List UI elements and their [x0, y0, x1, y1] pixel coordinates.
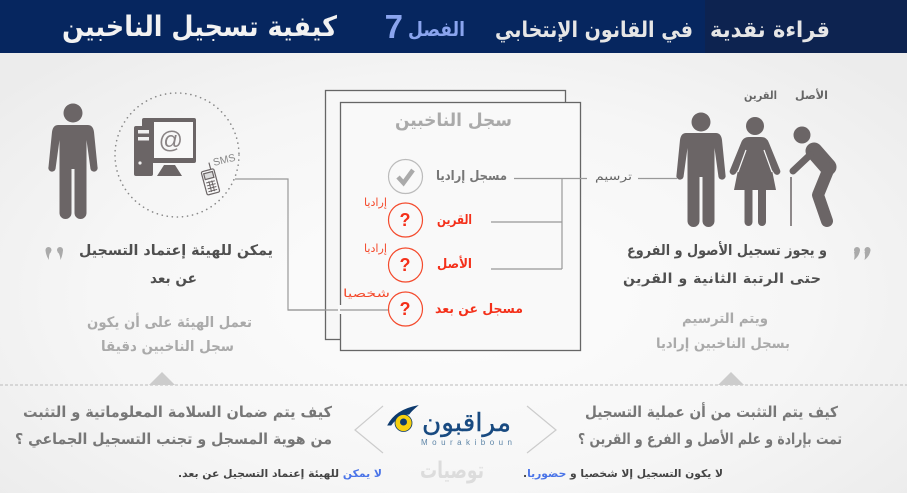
icon: woman: [730, 117, 780, 226]
connectors: enrolment bracket: [491, 178, 677, 269]
main title: كيفية تسجيل الناخبين: [62, 10, 338, 43]
chevron: left: [355, 406, 383, 453]
label: ascendant: الأصل: [437, 255, 472, 272]
header series title: قراءة نقدية: [710, 18, 830, 43]
chapter label: الفصل: [408, 17, 465, 41]
header subtitle: في القانون الإنتخابي: [495, 18, 693, 43]
icon: quote marks, left: [46, 247, 63, 260]
check circle: voluntary voter: [388, 160, 422, 194]
question circle: remote voter: ?: [400, 299, 410, 319]
arrow: left pointer: [149, 372, 175, 385]
header bar: [0, 0, 907, 53]
text block: ascendants and descendants: [623, 241, 827, 287]
question block: right: كيف يتم التثبت من أن عملية التسجيل: [585, 402, 838, 421]
icon: remote channels circle: [115, 93, 239, 217]
logo latin name: Mourakiboun: [421, 438, 512, 447]
icon: computer: @: [159, 127, 183, 154]
icon: quote marks, right: [854, 247, 870, 260]
chevron: right: [527, 406, 556, 453]
logo eye: [388, 406, 417, 432]
question circle: ascendant: [388, 248, 422, 282]
text block: voluntary enrolment: ويتم الترسيم: [682, 311, 768, 327]
question block: left: [15, 403, 332, 448]
question block: right: تمت بإرادة و علم الأصل و الفرع و القرين ؟: [578, 430, 842, 448]
register sheets: [288, 90, 580, 350]
label: spouse: القرين: [437, 213, 472, 228]
question block: left: كيف يتم ضمان السلامة المعلوماتية و التثبت: [23, 403, 332, 421]
text block: ascendants and descendants: حتى الرتبة الثانية و القرين: [623, 271, 821, 287]
text block: voluntary enrolment: [656, 311, 790, 352]
question block: left: من هوية المسجل و تجنب التسجيل الجماعي ؟: [15, 430, 332, 448]
chapter number: 7: [385, 8, 403, 45]
text block: ascendants and descendants: و يجوز تسجيل الأصول و الفروع: [627, 241, 827, 259]
logo wordmark: مراقبون: [422, 408, 511, 437]
question block: right: [578, 402, 842, 448]
icon: man, right: [676, 112, 726, 227]
heading: recommendations: توصيات: [420, 458, 484, 484]
icon: elderly man with cane: [791, 126, 829, 226]
label: SMS: SMS: [212, 152, 237, 169]
sheet title: سجل الناخبين: [395, 110, 512, 131]
icon: mobile phone: [199, 162, 220, 195]
labels: ascendant and spouse: الأصل: [795, 88, 828, 102]
text block: accurate register: [87, 313, 252, 355]
arrow: right pointer: [718, 372, 744, 385]
label: voluntary voter: مسجل إراديا: [436, 169, 507, 184]
question circle: spouse: ?: [400, 210, 410, 230]
text block: accurate register: تعمل الهيئة على أن يكون: [87, 313, 252, 331]
question circle: remote voter: [388, 292, 422, 326]
recommendation: right: لا يكون التسجيل إلا شخصيا و حضوريا.: [523, 468, 723, 480]
text block: remote accreditation: عن بعد: [150, 271, 197, 287]
note: voluntary spouse: إراديا: [364, 196, 387, 209]
text block: remote accreditation: يمكن للهيئة إعتماد التسجيل: [79, 243, 273, 259]
icon: man, left: [48, 104, 98, 219]
labels: ascendant and spouse: [744, 88, 828, 102]
text block: remote accreditation: [79, 243, 273, 287]
label: enrolment: ترسيم: [595, 170, 632, 183]
text block: accurate register: سجل الناخبين دقيقا: [101, 339, 234, 355]
connector: remote registration to sheet: [235, 179, 388, 310]
question circle: ascendant: ?: [400, 255, 410, 275]
note: in person: شخصيا: [343, 287, 390, 300]
dashed divider: [0, 384, 907, 386]
question circle: spouse: [388, 203, 422, 237]
label: remote voter: مسجل عن بعد: [435, 302, 523, 317]
note: voluntary ascendant: إراديا: [364, 242, 387, 255]
recommendation: left: لا يمكن للهيئة إعتماد التسجيل عن بعد.: [178, 468, 382, 480]
text block: voluntary enrolment: بسجل الناخبين إراديا: [656, 336, 790, 352]
labels: ascendant and spouse: القرين: [744, 89, 777, 102]
logo: Mourakiboun: [388, 406, 512, 447]
